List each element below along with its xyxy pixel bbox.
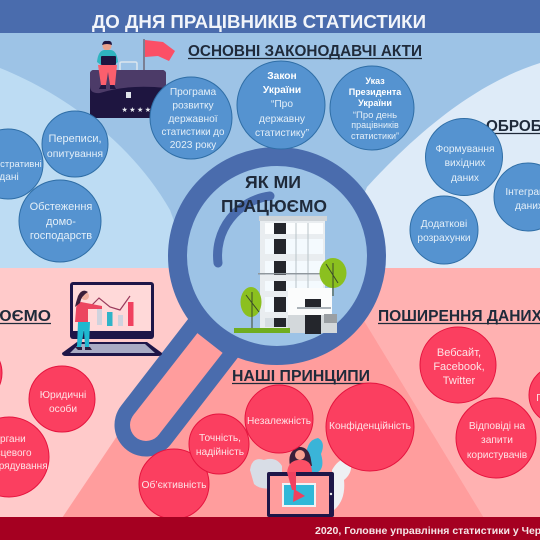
bubble: confidentiality: Конфіденційність: [329, 420, 411, 432]
heading: main legislative acts: ОСНОВНІ ЗАКОНОДАВЧІ АКТИ: [188, 43, 422, 60]
bubble: censuses: [42, 111, 108, 177]
bubble: website and social media: Twitter: [443, 375, 476, 387]
bubble: law of Ukraine: “Про: [271, 99, 293, 110]
upper background: [0, 33, 540, 269]
bubble: data integration: [494, 163, 540, 231]
bubble: local government: [0, 417, 49, 497]
bubble: statistics programme: статистики до: [162, 127, 225, 138]
bubble: objectivity: Об’єктивність: [142, 479, 206, 491]
bubble: statistics programme: розвитку: [172, 100, 215, 112]
bubble: law of Ukraine: України: [263, 85, 301, 96]
bubble: household surveys: [19, 180, 101, 262]
bubble: statistics programme: державної: [168, 114, 218, 125]
lower background: [0, 268, 540, 518]
bubble: censuses: Переписи,: [48, 133, 102, 145]
heading: our principles: НАШІ ПРИНЦИПИ: [232, 368, 370, 385]
bubble: statistics programme: [150, 77, 232, 159]
heading: how we work: [221, 172, 327, 216]
bubble: censuses: опитування: [47, 148, 103, 160]
bubble: answers to user requests: [456, 398, 536, 478]
bubble: website and social media: Facebook,: [433, 361, 485, 373]
bubble: household surveys: господарств: [30, 230, 92, 242]
bubble: website and social media: Вебсайт,: [437, 347, 481, 359]
bubble: independence: [245, 385, 313, 453]
bubble: statistics programme: Програма: [170, 87, 217, 98]
bubble: website and social media: [420, 327, 496, 403]
heading: how we work: ПРАЦЮЄМО: [221, 196, 327, 216]
bubble: legal entities: [29, 366, 95, 432]
bubble: source data formation: [426, 118, 502, 196]
bubble: presidential decree: статистики”: [351, 131, 399, 141]
bubble: law of Ukraine: [237, 61, 325, 149]
bubble: presidential decree: України: [358, 98, 392, 108]
bubble: answers to user requests: запити: [481, 435, 513, 446]
bubble: law of Ukraine: Закон: [267, 71, 297, 82]
icon: left tree: [240, 287, 262, 328]
bubble: presidential decree: працівників: [351, 120, 399, 130]
bubble: accuracy and reliability: [189, 414, 249, 474]
bubble: presidential decree: Президента: [349, 87, 402, 97]
magnifying glass: [130, 156, 376, 441]
bubble: confidentiality: [326, 383, 414, 471]
bubble: legal entities: особи: [49, 403, 77, 415]
bubble: legal entities: Юридичні: [40, 390, 86, 401]
heading: how we work: ЯК МИ: [245, 172, 301, 192]
bubble: answers to user requests: Відповіді на: [469, 421, 525, 432]
bubble: source data formation: вихідних: [445, 158, 485, 169]
bubble: administrative data: [0, 129, 43, 199]
bubble: statistics programme: 2023 року: [170, 140, 217, 151]
header bar: [0, 0, 540, 33]
bubble: presidential decree: Указ: [365, 76, 385, 86]
bubble: independence: Незалежність: [247, 416, 311, 427]
bubble: source data formation: даних: [451, 173, 479, 184]
bubble: additional calculations: Додаткові: [421, 219, 467, 230]
icon: building: [234, 216, 337, 334]
icon: briefcase with person and flag: [90, 39, 175, 118]
bubble: accuracy and reliability: Точність,: [199, 433, 241, 444]
bubble: objectivity: [139, 449, 209, 519]
bubble: law of Ukraine: статистику”: [255, 128, 310, 139]
bubble: presidential decree: [330, 66, 414, 150]
bubble: partially visible collection source: [0, 343, 2, 403]
footer bar: [0, 517, 540, 540]
bubble: household surveys: Обстеження: [30, 201, 92, 213]
bubble: law of Ukraine: державну: [259, 114, 306, 125]
bubble: source data formation: Формування: [435, 144, 495, 155]
icon: laptop with presenter: [62, 282, 162, 356]
bubble: household surveys: домо-: [46, 216, 76, 228]
title: ДО ДНЯ ПРАЦІВНИКІВ СТАТИСТИКИ: [92, 12, 426, 32]
icon: briefcase with person and flag: ★★★★: [121, 106, 153, 114]
bubble: partially visible publication: [529, 366, 540, 424]
icon: right tree: [320, 258, 346, 296]
bubble: presidential decree: “Про день: [353, 110, 397, 121]
bubble: additional calculations: розрахунки: [417, 233, 471, 244]
bubble: additional calculations: [410, 196, 478, 264]
icon: woman with tablet: [250, 438, 351, 517]
bubble: accuracy and reliability: надійність: [196, 447, 244, 458]
bubble: answers to user requests: користувачів: [467, 450, 527, 461]
